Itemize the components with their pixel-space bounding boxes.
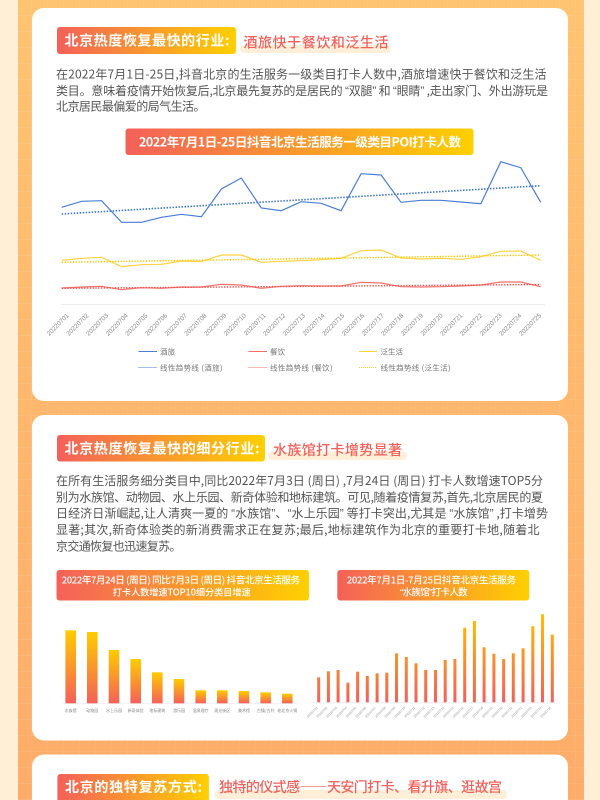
axis dates: 20220717 [361,312,386,338]
axis dates: 20220724 [498,312,524,338]
axis dates: 20220707 [164,312,189,338]
heading: unique recovery: 北京的独特复苏方式: [65,777,202,797]
line chart: POI check-ins by category [46,162,545,374]
chart title: POI check-ins: 2022年7月1日-25日抖音北京生活服务一级类目POI打卡人数 [139,132,461,150]
subheading: industry: 酒旅快于餐饮和泛生活 [244,32,388,52]
bar labels: 温泉理疗 [193,707,209,714]
heading: industry [57,27,236,54]
date labels: 20220705 [345,706,358,719]
text block: sub-industry description: 在所有生活服务细分类目中,同比2022年7月3日 (周日) ,7月24日 (周日) 打卡人数增速TOP5分 [56,472,543,489]
legend: 线性趋势线 (泛生活) [380,362,450,374]
panel: fastest recovering sub-industry [32,415,568,740]
date labels: 20220718 [471,706,484,719]
legend: 线性趋势线 (酒旅) [160,362,222,374]
text block: industry description: 类目。意味着疫情开始恢复后,北京最先复苏的是居民的 “双腿” 和 “眼睛” ,走出家门、外出游玩是 [56,82,548,99]
bar labels [65,707,297,714]
date labels: 20220725 [539,706,552,719]
axis dates: 20220725 [518,312,543,338]
legend [138,346,450,374]
chart title: POI check-ins [126,128,474,155]
legend: 酒旅 [160,346,175,358]
chart title: top 10 growth: 打卡人数增速TOP10细分类目增速 [113,585,251,599]
axis dates: 20220715 [321,312,347,338]
date labels: 20220711 [403,706,416,719]
text block: sub-industry description: 别为水族馆、动物园、水上乐园、新奇体验和地标建筑。可见,随着疫情复苏,首先,北京居民的夏 [56,488,543,506]
date labels: 20220706 [354,706,367,719]
date labels: 20220724 [530,706,543,719]
date labels: 20220717 [462,706,475,719]
subheading: sub-industry: 水族馆打卡增势显著 [273,440,402,460]
heading: unique recovery [57,774,209,800]
date labels: 20220723 [520,706,533,719]
axis dates: 20220719 [400,312,425,338]
bar labels: 新奇体验 [128,707,144,714]
text block: sub-industry description: 显著;其次,新奇体验类的新消费需求正在复苏;最后,地标建筑作为北京的重要打卡地,随着北 [56,521,540,538]
date labels: 20220716 [452,706,465,719]
date labels: 20220703 [325,706,338,719]
date labels [306,706,552,719]
bar chart: top 10 growth [63,630,297,714]
axis dates: 20220706 [144,312,169,338]
series: yellow general life [62,250,541,267]
axis dates: 20220708 [183,312,209,338]
bar labels: 观光街区 [214,707,230,714]
date labels: 20220710 [393,706,406,719]
trend: red [62,284,541,288]
series: red dining [62,282,541,290]
chart title: aquarium check-ins: “水族馆”打卡人数 [400,585,468,599]
axis dates: 20220701 [46,312,71,338]
axis dates: 20220704 [105,312,130,338]
axis dates: 20220705 [124,312,150,338]
axis dates: 20220712 [262,312,288,338]
text block: sub-industry description [56,472,548,554]
date labels: 20220709 [384,706,397,719]
date labels: 20220719 [481,706,494,719]
date labels: 20220702 [316,706,329,719]
trend: blue [62,186,541,214]
axis dates: 20220703 [85,312,110,338]
subheading: unique recovery: 独特的仪式感——天安门打卡、看升旗、逛故宫 [219,777,502,797]
date labels: 20220701 [306,706,319,719]
date labels: 20220707 [364,706,377,719]
bar labels: 美术馆 [238,707,250,714]
date labels: 20220704 [335,706,348,719]
text block: sub-industry description: 日经济日渐崛起,让人清爽一夏的 “水族馆”、“水上乐园” 等打卡突出,尤其是 “水族馆” ,打卡增势 [56,505,548,522]
date labels: 20220712 [413,706,426,719]
text block: industry description [56,65,548,114]
heading: sub-industry: 北京热度恢复最快的细分行业: [64,438,260,458]
bar labels: 水族馆 [65,707,77,714]
axis dates: 20220713 [282,312,307,338]
panel: fastest recovering industry [32,8,568,401]
axis dates: 20220716 [341,312,366,338]
date labels: 20220720 [491,706,504,719]
bar labels: 水上乐园 [106,707,122,714]
date labels: 20220713 [423,706,436,719]
bar labels: 古镇/古村 [257,707,274,714]
axis dates: 20220720 [420,312,445,338]
bar chart: aquarium check-ins [306,614,557,719]
bar labels: 游乐园 [173,707,185,714]
chart title: aquarium check-ins: 2022年7月1日-7月25日抖音北京生活服务 [347,573,516,587]
chart title: top 10 growth: 2022年7月24日 (周日) 同比7月3日 (周日) 抖音北京生活服务 [62,573,300,587]
axis dates: 20220721 [439,312,465,338]
legend: 餐饮 [270,346,285,358]
series: blue travel [62,162,541,222]
text block: industry description: 在2022年7月1日-25日,抖音北京的生活服务一级类目打卡人数中,酒旅增速快于餐饮和泛生活 [56,65,546,82]
axis dates: 20220711 [243,312,268,337]
axis dates: 20220723 [479,312,504,338]
axis dates: 20220710 [223,312,248,338]
axis dates: 20220702 [65,312,91,338]
text block: industry description: 北京居民最偏爱的局气生活。 [56,98,206,114]
panel: unique recovery style [32,754,568,800]
bar labels: 动物园 [86,707,98,714]
axis dates: 20220714 [301,312,327,338]
legend: 线性趋势线 (餐饮) [270,362,332,374]
text block: sub-industry description: 京交通恢复也迅速复苏。 [56,537,182,554]
axis dates: 20220709 [203,312,228,338]
chart title: top 10 growth [56,570,309,600]
date labels: 20220708 [374,706,387,719]
axis dates: 20220722 [459,312,484,338]
bar labels: 老北京火锅 [277,707,297,714]
date labels: 20220721 [500,706,513,719]
axis dates [46,312,543,338]
date labels: 20220722 [510,706,523,719]
heading: industry: 北京热度恢复最快的行业: [64,30,230,50]
chart title: aquarium check-ins [337,570,529,600]
date labels: 20220715 [442,706,455,719]
axis dates: 20220718 [380,312,406,338]
date labels: 20220714 [432,706,445,719]
bar labels: 地标建筑 [149,707,165,714]
legend: 泛生活 [380,346,403,358]
trend: yellow [62,255,541,262]
